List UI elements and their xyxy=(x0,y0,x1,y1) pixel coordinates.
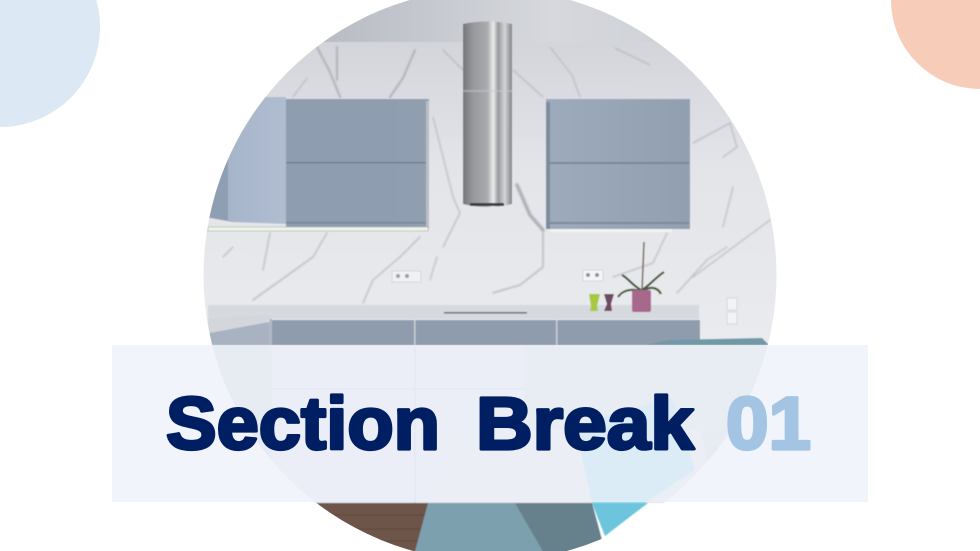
sofa back cushion behind band xyxy=(524,345,785,432)
teal sofa arm xyxy=(414,503,548,551)
lower cabinets xyxy=(209,319,700,346)
left wall cabinet xyxy=(286,99,429,229)
wall xyxy=(195,42,785,347)
sofa seat cushion behind band xyxy=(524,502,664,504)
sofa top edge xyxy=(648,338,768,345)
aqua pillow xyxy=(580,398,694,504)
left side cabinet xyxy=(205,97,286,224)
title: section break: Break xyxy=(476,382,695,465)
title: section number: 01 xyxy=(726,382,811,465)
title: section break xyxy=(166,382,695,465)
wall sockets xyxy=(392,270,737,324)
ceiling xyxy=(323,0,657,42)
room behind band xyxy=(212,344,738,460)
decorative circle: top-right peach xyxy=(891,0,980,89)
circular kitchen photo xyxy=(195,0,785,551)
lower cabinet fronts behind band xyxy=(316,502,430,504)
darker sofa cushion xyxy=(515,503,602,551)
decorative circle: top-left blue xyxy=(0,0,100,127)
under-cabinet light right xyxy=(550,229,672,232)
marble veins xyxy=(223,47,770,303)
title: section break: Section xyxy=(166,382,440,465)
under-cabinet light left xyxy=(208,227,428,231)
right wall cabinet xyxy=(546,99,690,229)
plant and glasses xyxy=(589,242,664,312)
countertop xyxy=(208,305,699,333)
range hood xyxy=(463,22,512,207)
floor xyxy=(316,502,428,551)
title xyxy=(166,382,811,465)
translucent title band xyxy=(112,345,868,502)
